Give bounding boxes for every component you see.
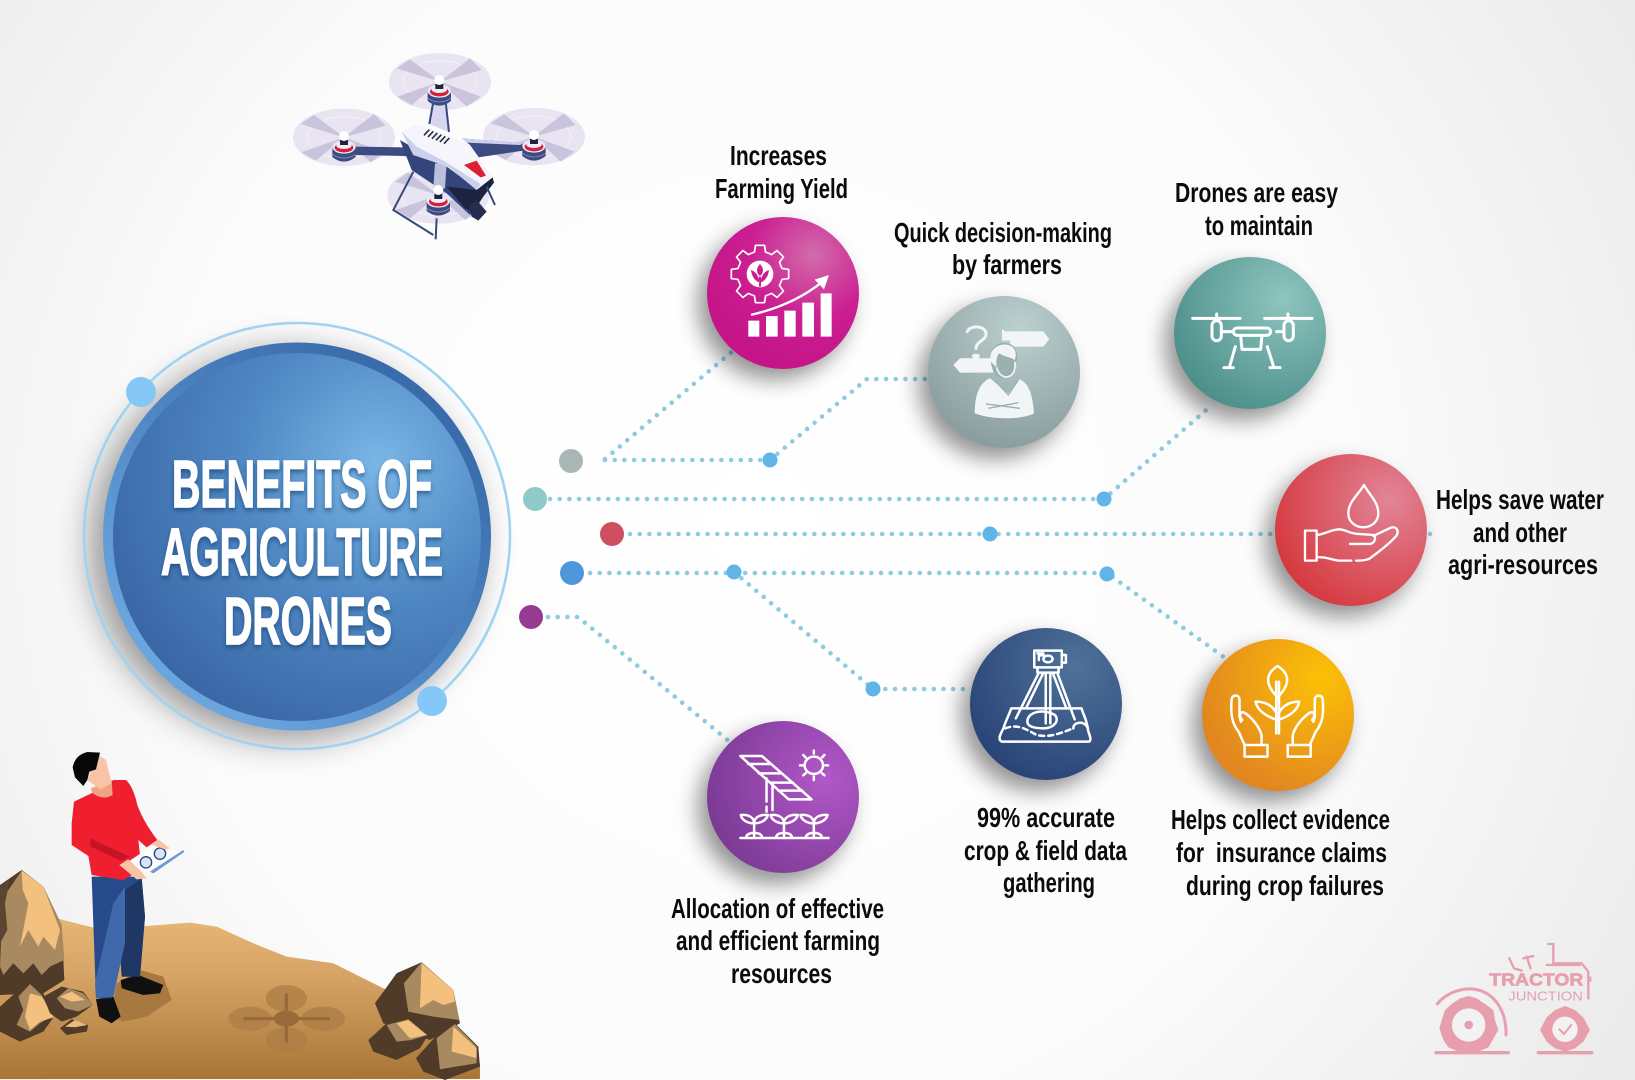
icon: drone outline [1193,314,1312,368]
pilot shadow [110,970,172,1022]
label: Helps collect evidence [1171,804,1390,835]
label: gathering [1003,867,1095,898]
icon: water drop on hand [1305,485,1398,561]
label [671,893,884,989]
label: Allocation of effective [671,893,884,924]
left rock [0,870,64,995]
benefit: insurance evidence [1171,639,1390,901]
circle [707,217,859,369]
shadow [698,732,850,884]
benefit: quick decision-making [894,217,1112,459]
shadow [698,228,850,380]
circle [928,296,1080,448]
circle [1202,639,1354,791]
label [1436,484,1604,580]
shadow [1165,268,1317,420]
circle [970,628,1122,780]
label: crop & field data [964,835,1127,866]
benefit: resource allocation [671,721,884,989]
illustration: hill with pilot and rocks [0,752,480,1080]
label [1171,804,1390,901]
label: Increases [730,140,827,171]
logo: Tractor Junction [1436,944,1592,1054]
title text [161,447,443,659]
pilot [72,752,184,1023]
central title badge [84,323,510,749]
benefit: easy to maintain [1165,177,1338,420]
shadow [919,307,1071,459]
benefit: saves water [1266,454,1604,617]
label [894,217,1112,280]
icon: hands holding plant [1231,666,1323,757]
label: and efficient farming [676,925,880,956]
connector nodes [519,449,1114,696]
icon: surveying tripod over field [1000,651,1090,742]
label [1175,177,1338,241]
right rocks [375,962,460,1040]
hill [0,918,480,1079]
benefit: accurate data gathering [961,628,1127,898]
label: by farmers [952,249,1062,280]
illustration: quadcopter drone [293,53,585,239]
label: Quick decision-making [894,217,1112,248]
label: 99% accurate [977,802,1115,833]
shadow [1266,465,1418,617]
label: for insurance claims [1176,837,1387,868]
label [964,802,1127,898]
label: during crop failures [1186,870,1384,901]
label: to maintain [1205,210,1313,241]
label: Farming Yield [715,173,848,204]
icon: gear and rising bars [731,245,832,337]
label [715,140,848,204]
small rocks [0,983,54,1042]
circle [1174,257,1326,409]
circle [707,721,859,873]
icon: person with signposts [953,327,1049,418]
logo: Tractor Junction: TRACTOR [1489,969,1583,989]
title text: AGRICULTURE [161,515,443,590]
label: resources [731,958,832,989]
shadow [961,639,1113,791]
drone shadow [228,985,345,1053]
logo: Tractor Junction: JUNCTION [1508,989,1583,1004]
label: Drones are easy [1175,177,1338,208]
icon: solar panel, sun and sprouts [740,751,829,838]
benefit: increases farming yield [698,140,859,380]
label: and other [1473,517,1567,548]
title text: BENEFITS OF [172,447,432,522]
shadow [1193,650,1345,802]
title text: DRONES [224,584,392,659]
dotted connector lines [548,350,1433,742]
circle [1275,454,1427,606]
